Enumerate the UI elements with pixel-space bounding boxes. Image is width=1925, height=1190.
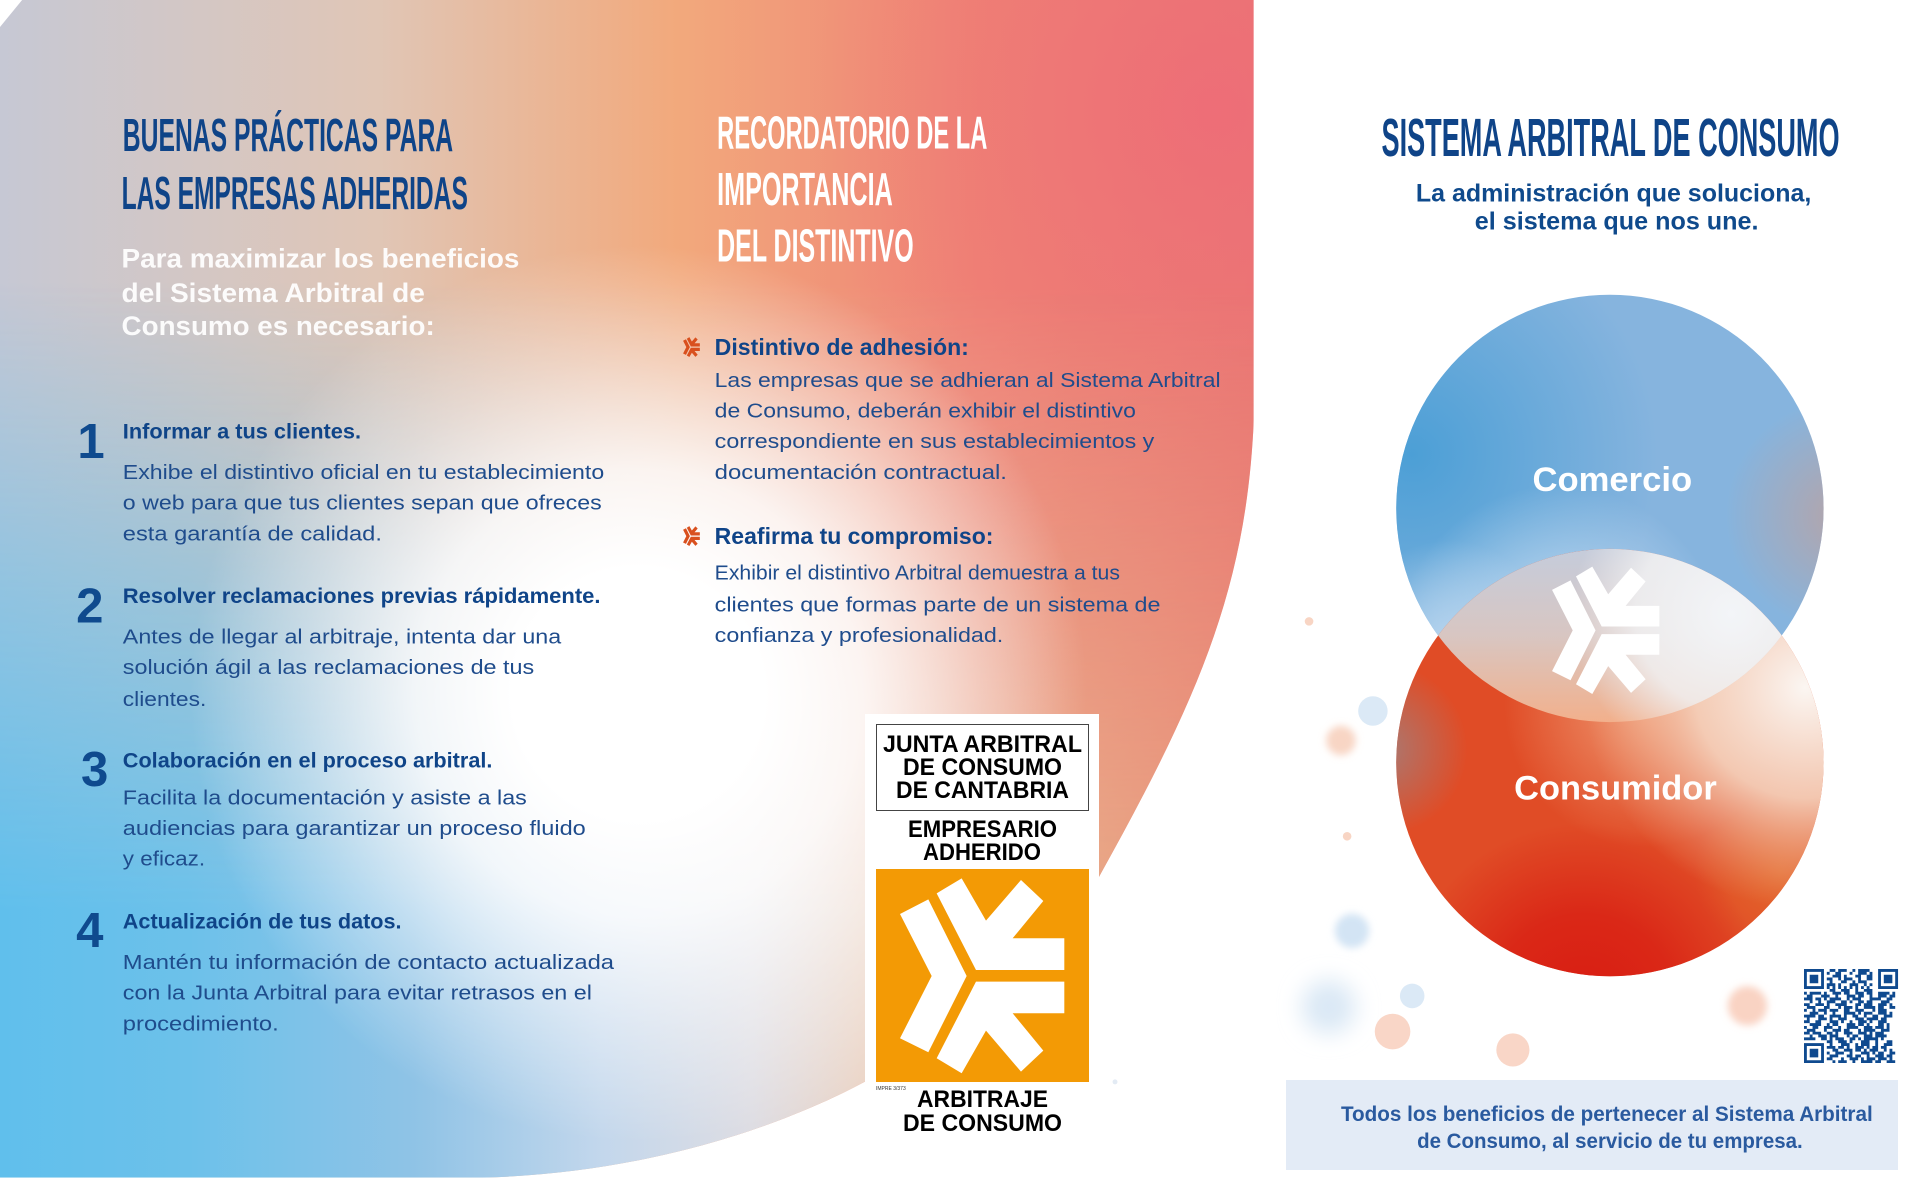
item 2: resolver reclamaciones: Antes de llegar al arbitraje, intenta dar una xyxy=(123,625,562,648)
decorative dots xyxy=(1113,617,1767,1084)
panel: recordatorio xyxy=(715,107,1221,647)
heading: recordatorio: IMPORTANCIA xyxy=(717,163,893,215)
item 3: colaboración: y eficaz. xyxy=(123,848,205,871)
item 3: colaboración xyxy=(81,743,586,871)
item 1: informar a tus clientes xyxy=(77,415,604,545)
item 3: colaboración: audiencias para garantizar un proceso fluido xyxy=(123,817,586,840)
panel: buenas prácticas xyxy=(76,109,615,1035)
title block: sistema arbitral xyxy=(1382,108,1840,236)
badge subtitle: EMPRESARIO xyxy=(908,816,1057,843)
badge footer xyxy=(903,1086,1062,1137)
circle: comercio xyxy=(1396,294,1824,636)
item 1: informar a tus clientes: esta garantía de calidad. xyxy=(123,522,382,545)
subtitle: el sistema que nos une. xyxy=(1475,209,1758,236)
badge: distintivo arbitral xyxy=(865,714,1099,1160)
badge subtitle: ADHERIDO xyxy=(923,839,1041,866)
icon: bullet 1 xyxy=(683,337,700,357)
block: distintivo de adhesión: Distintivo de adhesión: xyxy=(715,334,969,360)
block: reafirma tu compromiso xyxy=(715,523,1160,647)
block: distintivo de adhesión: documentación contractual. xyxy=(715,461,1007,484)
item 4: actualización: con la Junta Arbitral para evitar retrasos en el xyxy=(123,982,592,1005)
badge header box: JUNTA ARBITRAL xyxy=(883,731,1082,758)
block: reafirma tu compromiso: Exhibir el distintivo Arbitral demuestra a tus xyxy=(715,562,1120,585)
block: reafirma tu compromiso: Reafirma tu compromiso: xyxy=(715,523,993,549)
badge subtitle xyxy=(908,816,1057,866)
intro text: Consumo es necesario: xyxy=(122,311,435,341)
block: reafirma tu compromiso: confianza y profesionalidad. xyxy=(715,624,1003,647)
item 3: colaboración: 3 xyxy=(81,743,108,797)
block: distintivo de adhesión: de Consumo, deberán exhibir el distintivo xyxy=(715,400,1136,423)
panel: gradient background xyxy=(0,0,1254,1179)
venn: comercio and consumidor circles xyxy=(1388,289,1830,982)
label: comercio: Comercio xyxy=(1533,461,1692,499)
item 3: colaboración: Facilita la documentación y asiste a las xyxy=(123,786,527,809)
badge footer: DE CONSUMO xyxy=(903,1110,1062,1137)
block: distintivo de adhesión: Las empresas que se adhieran al Sistema Arbitral xyxy=(715,369,1221,392)
item 4: actualización: 4 xyxy=(76,904,104,958)
item 1: informar a tus clientes: o web para que tus clientes sepan que ofreces xyxy=(123,492,602,515)
item 4: actualización: procedimiento. xyxy=(123,1012,279,1035)
item 2: resolver reclamaciones: solución ágil a las reclamaciones de tus xyxy=(123,656,534,679)
icon: central logo xyxy=(1552,567,1659,694)
item 4: actualización: Mantén tu información de contacto actualizada xyxy=(123,951,615,974)
subtitle xyxy=(1416,180,1811,236)
block: distintivo de adhesión xyxy=(715,334,1221,484)
heading: buenas prácticas: LAS EMPRESAS ADHERIDAS xyxy=(122,167,468,219)
item 2: resolver reclamaciones: 2 xyxy=(76,580,103,634)
item 4: actualización: Actualización de tus datos. xyxy=(123,910,402,933)
subtitle: La administración que soluciona, xyxy=(1416,180,1811,207)
heading: recordatorio xyxy=(717,107,987,272)
badge footer: ARBITRAJE xyxy=(917,1086,1048,1113)
block: reafirma tu compromiso: clientes que formas parte de un sistema de xyxy=(715,594,1160,617)
footer banner xyxy=(1286,1080,1898,1170)
badge print code: IMPRE 3/373 xyxy=(876,1086,906,1092)
item 2: resolver reclamaciones: Resolver reclamaciones previas rápidamente. xyxy=(123,585,600,608)
badge header box xyxy=(876,724,1088,810)
item 2: resolver reclamaciones xyxy=(76,580,600,711)
icon: bullet 2 xyxy=(683,526,700,546)
label: consumidor: Consumidor xyxy=(1514,769,1717,807)
intro text: Para maximizar los beneficios xyxy=(122,244,519,274)
item 2: resolver reclamaciones: clientes. xyxy=(123,688,206,711)
heading: recordatorio: RECORDATORIO DE LA xyxy=(717,107,987,159)
footer banner: Todos los beneficios de pertenecer al Sistema Arbitral xyxy=(1341,1103,1873,1126)
item 1: informar a tus clientes: Exhibe el distintivo oficial en tu establecimiento xyxy=(123,461,604,484)
item 3: colaboración: Colaboración en el proceso arbitral. xyxy=(123,750,492,773)
item 4: actualización xyxy=(76,904,615,1035)
badge header box: DE CONSUMO xyxy=(903,754,1062,781)
block: distintivo de adhesión: correspondiente en sus establecimientos y xyxy=(715,430,1155,453)
footer banner: de Consumo, al servicio de tu empresa. xyxy=(1417,1130,1803,1153)
overlap lens xyxy=(1438,548,1782,722)
item 1: informar a tus clientes: 1 xyxy=(77,415,105,469)
badge header box: DE CANTABRIA xyxy=(896,777,1069,804)
circle: consumidor xyxy=(1388,540,1830,982)
heading: buenas prácticas xyxy=(122,109,468,219)
intro text xyxy=(122,244,519,341)
badge orange logo xyxy=(876,869,1089,1082)
heading: recordatorio: DEL DISTINTIVO xyxy=(717,220,914,272)
heading: buenas prácticas: BUENAS PRÁCTICAS PARA xyxy=(123,109,453,161)
intro text: del Sistema Arbitral de xyxy=(122,278,425,308)
qr code xyxy=(1804,970,1897,1062)
item 1: informar a tus clientes: Informar a tus clientes. xyxy=(123,420,361,443)
